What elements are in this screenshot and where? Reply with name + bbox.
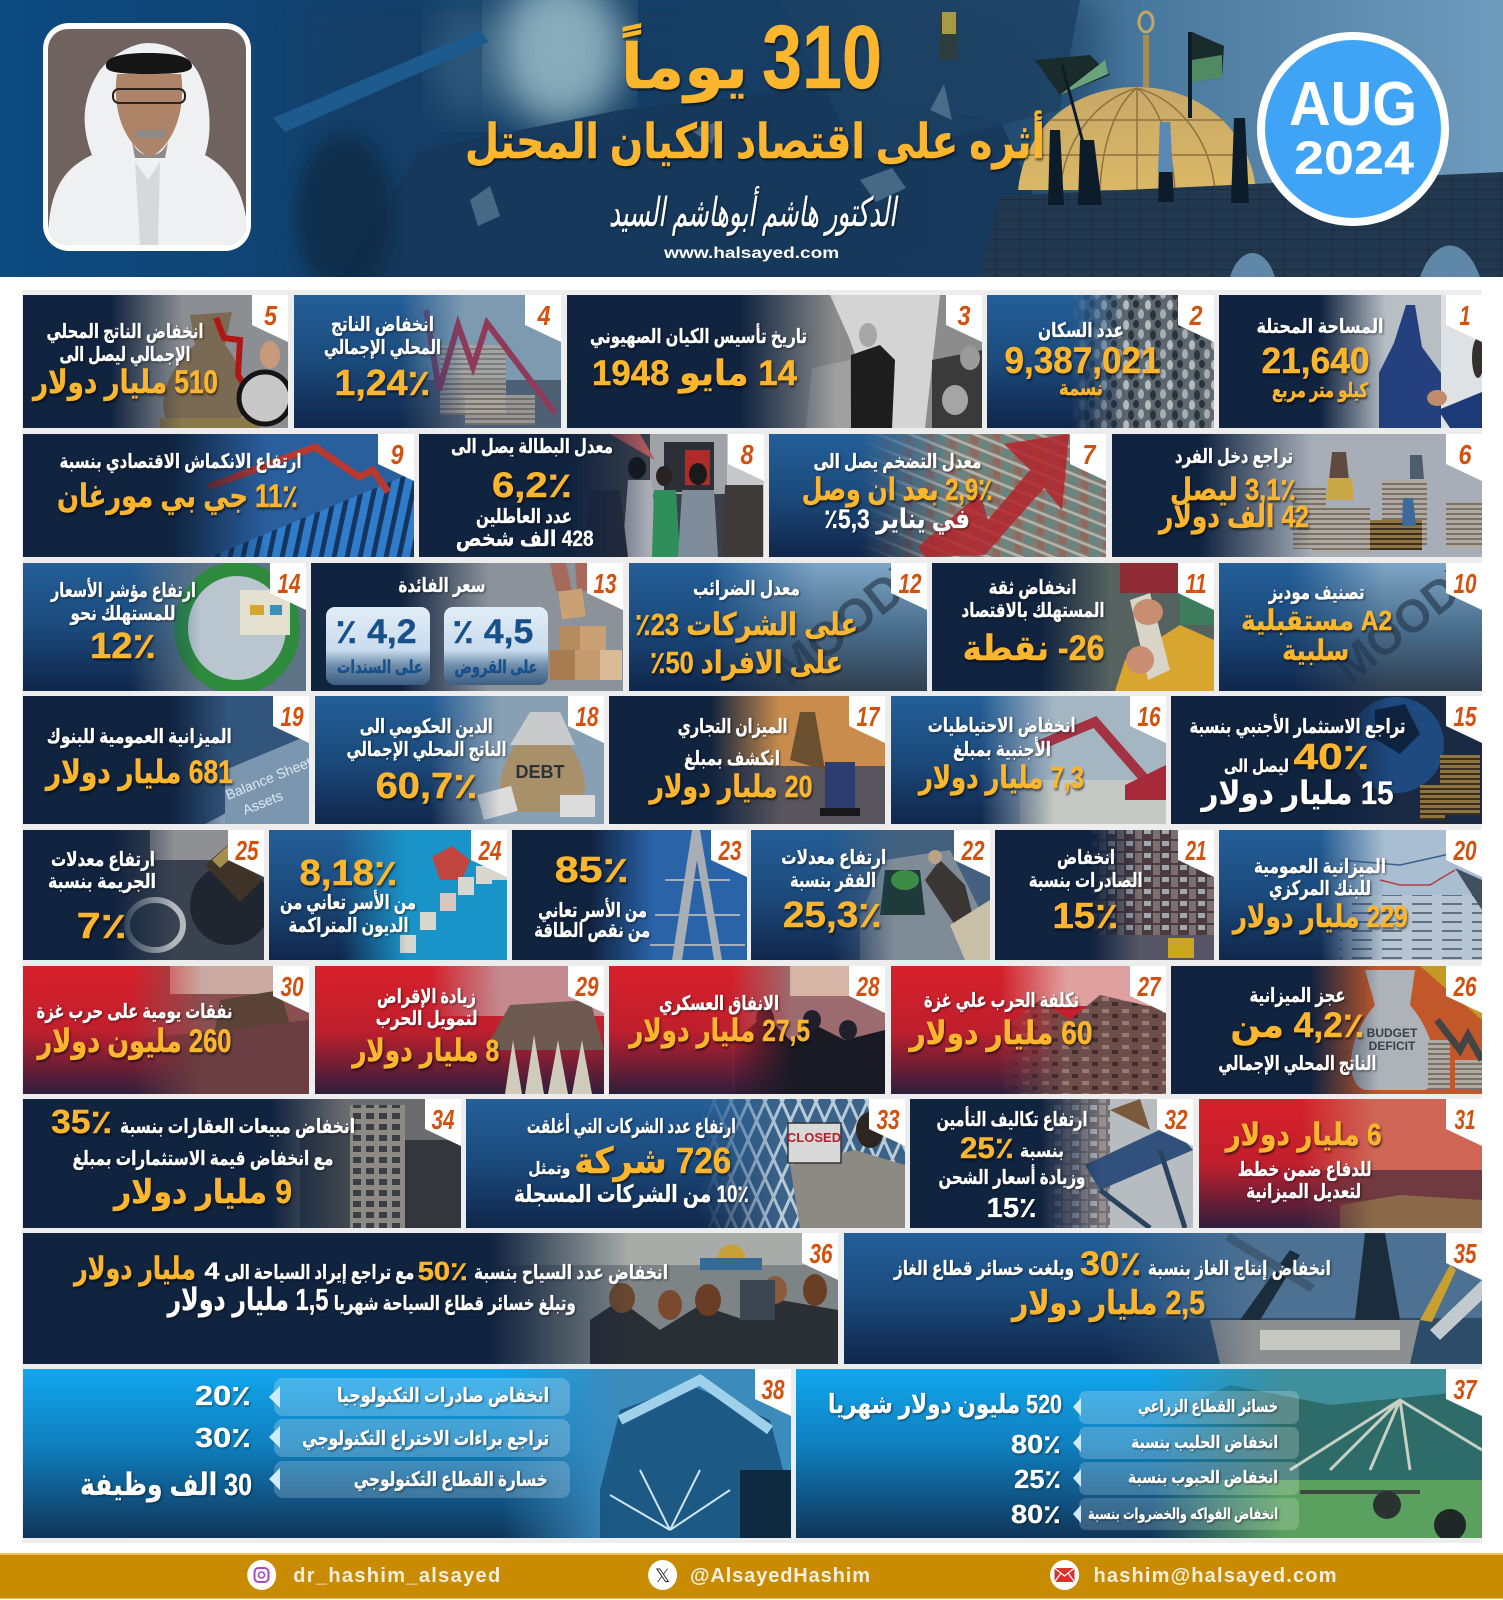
text: heading: سعر الفائدة <box>398 575 486 597</box>
photo: container yard <box>1090 830 1214 960</box>
row: tech job losses <box>80 1461 570 1503</box>
row: tech patents: تراجع براءات الاختراع التكنولوجي <box>302 1428 549 1451</box>
number badge 23 <box>711 830 747 877</box>
number badge 3: 3 <box>958 300 971 331</box>
photo: coins and falling arrow <box>400 295 561 428</box>
panel 3: founding date <box>567 295 982 428</box>
panel 17: trade balance <box>609 696 885 824</box>
row: tech patents <box>195 1419 570 1457</box>
photo: soldiers <box>730 966 885 1094</box>
panel 23: energy shortage <box>512 830 747 960</box>
text: heading: ارتفاع مؤشر الأسعار <box>50 577 196 602</box>
row: grain decline: انخفاض الحبوب بنسبة <box>1128 1468 1278 1488</box>
number badge 34 <box>425 1099 461 1146</box>
card: rate on bonds: 4,2 ٪ <box>336 613 416 651</box>
panel 32: insurance costs: 15٪ <box>987 1192 1037 1223</box>
photo: destroyed buildings <box>1000 966 1166 1094</box>
number badge 20 <box>1446 830 1482 877</box>
text: value: 260 مليون دولار <box>36 1023 232 1060</box>
text: value: 60 مليار دولار <box>908 1015 1092 1052</box>
photo: GDP bag <box>110 295 291 428</box>
text: value: 2,5 مليار دولار <box>1010 1284 1205 1323</box>
panel 17: trade balance: انكشف بمبلغ <box>684 748 780 770</box>
photo: power pylon <box>590 830 747 960</box>
number badge 6 <box>1446 434 1482 481</box>
number badge 13 <box>587 563 623 610</box>
panel 10: Moody's rating: سلبية <box>1282 635 1349 666</box>
text: second line <box>166 1282 576 1318</box>
panel 10: Moody's rating <box>1219 563 1482 691</box>
number badge 1 <box>1446 295 1482 342</box>
panel 20: central bank balance sheet <box>1219 830 1482 960</box>
panel 19: banks balance sheet <box>23 696 309 824</box>
website url: www.halsayed.com <box>663 245 839 262</box>
card: rate on bonds: على السندات <box>337 657 423 677</box>
photo: percent cubes <box>400 563 623 691</box>
panel 12: tax rates: على الافراد 50٪ <box>650 645 843 681</box>
grid background panel <box>22 290 1482 1543</box>
text: heading: معدل التضخم يصل الى <box>814 451 982 473</box>
text: percent: 40٪ <box>1294 736 1370 777</box>
text: value: A2 مستقبلية <box>1241 605 1392 636</box>
panel 24: household debt <box>269 830 507 960</box>
row: milk decline: انخفاض الحليب بنسبة <box>1131 1433 1278 1453</box>
panel 30: daily war spending <box>23 966 309 1094</box>
portrait of Dr. Hashim <box>43 23 251 251</box>
panel 34: real estate <box>23 1099 461 1228</box>
photo: globe and coins <box>1330 696 1482 824</box>
row: tech exports: انخفاض صادرات التكنولوجيا <box>337 1385 549 1407</box>
number badge 33 <box>869 1099 905 1146</box>
panel 37: agriculture losses <box>796 1369 1482 1541</box>
panel 36: tourism <box>23 1233 838 1364</box>
photo: artillery shells <box>430 966 604 1094</box>
number badge 11: 11 <box>1186 568 1206 599</box>
row: agricultural losses: خسائر القطاع الزراعي <box>1138 1397 1278 1417</box>
panel 31: defense budget: لتعديل الميزانية <box>1246 1181 1361 1203</box>
panel 15: foreign investment: ليصل الى <box>1224 756 1289 776</box>
photo: receipt in hand <box>1040 563 1214 691</box>
number badge 28 <box>849 966 885 1013</box>
text: heading: انخفاض مبيعات العقارات بنسبة <box>120 1116 355 1138</box>
photo: balance sheet paper: Assets <box>240 787 285 818</box>
photo: apartment towers <box>270 1099 461 1228</box>
text: value: 1,24٪ <box>334 362 430 403</box>
panel 24: household debt: الديون المتراكمة <box>288 915 408 937</box>
text: value: 681 مليار دولار <box>44 754 233 791</box>
text: heading: الميزان التجاري <box>678 716 788 739</box>
panel 29: war borrowing: لتمويل الحرب <box>376 1008 478 1030</box>
number badge 32 <box>1157 1099 1193 1146</box>
photo: dumpster <box>830 830 990 960</box>
text: heading: نفقات يومية على حرب غزة <box>36 1001 232 1023</box>
title: 310 days: 310 <box>762 8 882 108</box>
panel 27: war cost <box>891 966 1166 1094</box>
text: first line: مليار دولار <box>72 1251 196 1287</box>
card: rate on loans: 4,5 ٪ <box>452 613 533 651</box>
number badge 4 <box>525 295 561 342</box>
number badge 35 <box>1446 1233 1482 1280</box>
number badge 29 <box>568 966 604 1013</box>
photo: closed sign on gate: CLOSED <box>787 1130 841 1145</box>
panel 21: exports: الصادرات بنسبة <box>1029 870 1143 892</box>
text: value: 60,7٪ <box>376 765 478 806</box>
header banner <box>0 0 1503 295</box>
text: value: 7٪ <box>77 905 127 946</box>
text: heading: انخفاض الناتج المحلي <box>46 321 204 344</box>
text: value: 21,640 <box>1262 340 1370 381</box>
footer bar <box>0 1553 1503 1599</box>
text: heading: انخفاض <box>1057 847 1115 869</box>
photo: tanks <box>130 966 309 1094</box>
number badge 38 <box>755 1369 791 1416</box>
panel 21: exports <box>995 830 1214 960</box>
text: heading: تكلفة الحرب علي غزة <box>924 990 1079 1013</box>
photo: gavel and handcuffs <box>110 830 270 960</box>
panel 18: government debt: الناتج المحلي الإجمالي <box>346 739 506 762</box>
panel 32: insurance costs <box>910 1099 1193 1228</box>
text: first line: انخفاض عدد السياح بنسبة <box>474 1262 668 1284</box>
x contact: @AlsayedHashim <box>690 1565 870 1587</box>
number badge 18 <box>568 696 604 743</box>
title: 310 days: يوماً <box>621 22 748 103</box>
photo: container crane <box>1040 1099 1193 1228</box>
panel 8: unemployment <box>419 434 764 557</box>
panel 6: per capita income: 42 الف دولار <box>1157 499 1309 535</box>
photo: debt dice and house <box>340 830 507 960</box>
number badge 3 <box>946 295 982 342</box>
photo: irrigation field <box>1150 1369 1482 1541</box>
number badge 2 <box>1178 295 1214 342</box>
panel 32: insurance costs: 25٪ <box>960 1132 1014 1165</box>
text: heading: الدين الحكومي الى <box>360 716 493 739</box>
number badge 11 <box>1178 563 1214 610</box>
photo: welding robots <box>500 1369 791 1538</box>
panel 26: budget deficit <box>1171 966 1482 1094</box>
panel 38: technology losses <box>23 1369 791 1538</box>
number badge 8: 8 <box>740 439 754 470</box>
row: fruit and vegetables decline: انخفاض الفواكه والخضروات بنسبة <box>1088 1506 1278 1523</box>
email contact <box>1050 1560 1336 1590</box>
photo: map <box>1320 295 1484 428</box>
photo: historic flag raising <box>740 295 982 428</box>
text: value: 4,2٪ من <box>1230 1006 1364 1046</box>
text: value: 2,9٪ بعد ان وصل <box>802 472 993 508</box>
text: second line: وتبلغ خسائر قطاع السياحة شهريا <box>334 1293 576 1315</box>
instagram contact <box>247 1560 500 1590</box>
photo: budget deficit bag: BUDGET <box>1367 1026 1418 1040</box>
panel 13: interest rate <box>311 563 623 691</box>
number badge 12 <box>891 563 927 610</box>
number badge 12: 12 <box>898 568 922 599</box>
text: first line: وبلغت خسائر قطاع الغاز <box>893 1258 1074 1280</box>
number badge 25 <box>228 830 264 877</box>
panel 2: population <box>987 295 1214 428</box>
number badge 31 <box>1446 1099 1482 1146</box>
number badge 36 <box>802 1233 838 1280</box>
text: value: 9 مليار دولار <box>112 1173 292 1212</box>
panel 33: closed companies: وتمثل <box>528 1159 570 1179</box>
text: first line: 50٪ <box>418 1256 468 1286</box>
panel 22: poverty: الفقر بنسبة <box>790 870 876 892</box>
panel 7: inflation: في يناير 5,3٪ <box>824 504 970 535</box>
text: heading: تراجع دخل الفرد <box>1175 446 1293 468</box>
text: heading: الميزانية العمومية <box>1254 856 1386 878</box>
title: 310 days <box>621 8 882 108</box>
photo: magnifier on calculator <box>130 563 306 691</box>
text: heading: المساحة المحتلة <box>1256 316 1384 338</box>
text: value: على الشركات 23٪ <box>635 607 858 643</box>
x contact <box>648 1560 870 1590</box>
row: milk decline <box>1011 1427 1299 1459</box>
row: tech exports: 20٪ <box>195 1380 251 1411</box>
text: value: 85٪ <box>555 849 629 890</box>
text: heading: انخفاض ثقة <box>989 577 1077 599</box>
text: heading: ارتفاع معدلات <box>781 847 886 869</box>
text: value: 6,2٪ <box>492 466 572 505</box>
card: rate on loans: على القروض <box>454 657 538 678</box>
number badge 8 <box>728 434 764 481</box>
number badge 25: 25 <box>235 835 259 866</box>
photo: closed sign on gate <box>700 1099 905 1228</box>
instagram contact: dr_hashim_alsayed <box>293 1565 500 1587</box>
photo: debt bag <box>430 696 604 824</box>
panel 16: foreign reserves <box>891 696 1166 824</box>
row: grain decline <box>1014 1462 1299 1495</box>
number badge 6: 6 <box>1458 439 1472 470</box>
text: heading: زيادة الإقراض <box>377 986 476 1008</box>
number badge 16 <box>1130 696 1166 743</box>
row: agricultural losses: 520 مليون دولار شهريا <box>828 1389 1062 1420</box>
number badge 24 <box>471 830 507 877</box>
subtitle: أثره على اقتصاد الكيان المحتل <box>465 110 1045 170</box>
number badge 5: 5 <box>264 300 277 331</box>
date badge: AUG 2024: AUG <box>1289 70 1417 139</box>
text: value: 26- نقطة <box>963 629 1105 668</box>
panel 7: inflation <box>769 434 1106 557</box>
photo: city lights <box>1300 1099 1482 1228</box>
panel 18: government debt <box>315 696 604 824</box>
text: first line: 4 <box>204 1258 220 1285</box>
row: tech job losses: خسارة القطاع التكنولوجي <box>354 1469 548 1492</box>
photo: budget deficit bag <box>1310 966 1482 1094</box>
text: value: 510 مليار دولار <box>31 364 218 401</box>
row: agricultural losses <box>828 1389 1299 1424</box>
card: rate on loans <box>444 607 548 685</box>
text: heading: عجز الميزانية <box>1250 985 1346 1007</box>
row: fruit and vegetables decline <box>1011 1498 1299 1530</box>
photo: Moody's building <box>1300 563 1482 691</box>
email contact: hashim@halsayed.com <box>1094 1565 1336 1587</box>
number badge 19 <box>273 696 309 743</box>
panel 14: consumer price index <box>23 563 306 691</box>
text: description: للدفاع ضمن خطط <box>1238 1159 1372 1181</box>
text: value: 6 مليار دولار <box>1224 1117 1382 1153</box>
panel 34: real estate: 35٪ <box>51 1103 112 1140</box>
panel 9: contraction <box>23 434 414 557</box>
row: fruit and vegetables decline: 80٪ <box>1011 1499 1061 1529</box>
text: description: مع انخفاض قيمة الاستثمارات بمبلغ <box>72 1148 334 1170</box>
text: value: 8,18٪ <box>300 852 398 893</box>
number badge 10 <box>1446 563 1482 610</box>
panel 16: foreign reserves: الأجنبية بمبلغ <box>953 736 1051 761</box>
number badge 21 <box>1178 830 1214 877</box>
number badge 1: 1 <box>1460 300 1470 331</box>
panel 15: foreign investment <box>1171 696 1482 824</box>
text: heading: ارتفاع تكاليف التأمين <box>936 1105 1088 1131</box>
text: value: 3,1٪ ليصل <box>1170 472 1296 507</box>
author calligraphy signature: الدكتور هاشم أبوهاشم السيد <box>609 186 898 236</box>
text: first line: 30٪ <box>1080 1245 1141 1283</box>
photo: balance sheet paper <box>170 696 314 824</box>
text: first line <box>72 1251 668 1287</box>
panel 25: crime rate <box>23 830 264 960</box>
text: heading: تصنيف موديز <box>1268 582 1365 604</box>
number badge 2: 2 <box>1189 300 1203 331</box>
number badge 15 <box>1446 696 1482 743</box>
text: heading: عدد السكان <box>1038 320 1124 342</box>
text: description: من الأسر تعاني من <box>280 889 416 915</box>
photo: crowd <box>1070 295 1214 428</box>
number badge 22 <box>954 830 990 877</box>
text: heading: انخفاض الاحتياطيات <box>928 715 1076 737</box>
panel 20: central bank balance sheet: للبنك المركزي <box>1269 878 1371 901</box>
number badge 19: 19 <box>280 701 304 732</box>
text: first line: مع تراجع إيراد السياحة الى <box>224 1262 414 1284</box>
text: heading: معدل البطالة يصل الى <box>451 436 613 458</box>
text: value: 12٪ <box>90 625 156 666</box>
text: value: 8 مليار دولار <box>351 1033 499 1069</box>
row: tech exports <box>195 1378 570 1416</box>
number badge 7: 7 <box>1082 439 1097 470</box>
number badge 27 <box>1130 966 1166 1013</box>
text: heading: ارتفاع عدد الشركات التي أغلقت <box>527 1112 736 1139</box>
text: heading: ارتفاع الانكماش الاقتصادي بنسبة <box>60 451 302 474</box>
text: shipping: وزيادة أسعار الشحن <box>938 1163 1086 1189</box>
photo: offshore gas rig <box>1100 1233 1482 1364</box>
panel 31: defense budget <box>1199 1099 1482 1228</box>
photo: Moody's building: MOODY'S <box>764 517 974 697</box>
text: heading: الانفاق العسكري <box>659 993 779 1016</box>
text: value: 15 مليار دولار <box>1200 775 1394 812</box>
text: first line: انخفاض إنتاج الغاز بنسبة <box>1148 1258 1331 1280</box>
date badge: AUG 2024 <box>1257 32 1449 226</box>
text: description: الناتج المحلي الإجمالي <box>1218 1053 1376 1076</box>
panel 4: GDP decline: المحلي الإجمالي <box>324 337 441 360</box>
panel 33: closed companies <box>466 1099 905 1228</box>
number badge 30 <box>273 966 309 1013</box>
text: unit: نسمة <box>1059 378 1103 400</box>
number badge 9: 9 <box>390 439 404 470</box>
panel 14: consumer price index: للمستهلك نحو <box>70 603 176 625</box>
number badge 4: 4 <box>537 300 551 331</box>
panel 23: energy shortage: من نقص الطاقة <box>534 920 650 942</box>
text: heading: معدل الضرائب <box>693 578 800 600</box>
text: second line: 1,5 مليار دولار <box>166 1282 328 1318</box>
text: heading: الميزانية العمومية للبنوك <box>47 726 232 748</box>
text: value: 20 مليار دولار <box>648 769 812 805</box>
panel 11: consumer confidence: المستهلك بالاقتصاد <box>962 600 1104 622</box>
row: grain decline: 25٪ <box>1014 1464 1061 1494</box>
panel 12: tax rates <box>629 563 927 691</box>
text: description: من الأسر تعاني <box>538 897 647 923</box>
panel 25: crime rate: الجريمة بنسبة <box>48 871 156 893</box>
number badge 37 <box>1446 1369 1482 1416</box>
text: description: 10٪ من الشركات المسجلة <box>514 1181 749 1208</box>
number badge 5 <box>252 295 288 342</box>
row: milk decline: 80٪ <box>1011 1429 1061 1459</box>
header background photo: rubble, smoke and dome <box>0 0 1503 277</box>
panel 5: GDP value: الإجمالي ليصل الى <box>60 344 190 367</box>
number badge 14 <box>270 563 306 610</box>
photo: port at sunset <box>710 696 885 824</box>
panel 4: GDP decline <box>294 295 561 428</box>
text: value: 11٪ جي بي مورغان <box>57 478 298 515</box>
number badge 7 <box>1070 434 1106 481</box>
photo: shelves with red arrow <box>860 434 1106 557</box>
photo: dollars and red arrow <box>980 696 1166 824</box>
number badge 17 <box>849 696 885 743</box>
text: heading: تاريخ تأسيس الكيان الصهيوني <box>590 322 807 349</box>
panel 5: GDP value <box>23 295 288 428</box>
photo: tourists and Jerusalem view <box>490 1233 838 1364</box>
text: value: 14 مايو 1948 <box>592 354 798 394</box>
row: tech patents: 30٪ <box>195 1422 251 1453</box>
panel 28: military spending <box>609 966 885 1094</box>
text: value: 15٪ <box>1052 895 1118 936</box>
panel 6: per capita income <box>1112 434 1482 557</box>
photo: balance sheet paper: Balance Sheet <box>223 754 314 803</box>
photo: budget deficit bag: DEFICIT <box>1369 1039 1416 1053</box>
photo: blue bar chart with arrow <box>170 434 414 557</box>
text: value: 9,387,021 <box>1004 340 1160 381</box>
photo: coin stacks with figures <box>1200 434 1482 557</box>
text: unit: كيلو متر مربع <box>1272 380 1368 402</box>
panel 22: poverty <box>751 830 990 960</box>
text: heading: ارتفاع معدلات <box>51 849 155 871</box>
number badge 10: 10 <box>1454 568 1477 599</box>
number badge 26 <box>1446 966 1482 1013</box>
text: heading: تراجع الاستثمار الأجنبي بنسبة <box>1190 713 1406 739</box>
text: value: 229 مليار دولار <box>1231 899 1408 935</box>
photo: debt bag: DEBT <box>516 762 565 782</box>
text: first line <box>893 1245 1331 1283</box>
photo: financial chart paper <box>1320 830 1482 960</box>
text: value: 726 شركة <box>574 1140 731 1182</box>
panel 29: war borrowing <box>315 966 604 1094</box>
panel 35: gas production <box>844 1233 1482 1364</box>
photo: people queueing <box>570 434 764 557</box>
date badge: AUG 2024: 2024 <box>1294 131 1414 184</box>
card: rate on bonds <box>326 607 430 685</box>
panel 8: unemployment: 428 الف شخص <box>456 526 594 551</box>
x contact: 𝕏 <box>655 1566 670 1587</box>
text: unemployed count: عدد العاطلين <box>476 506 572 528</box>
text: value: 27,5 مليار دولار <box>628 1013 810 1049</box>
text: value: 7,3 مليار دولار <box>917 760 1084 796</box>
panel 11: consumer confidence <box>932 563 1214 691</box>
text: value: 25,3٪ <box>783 894 882 935</box>
number badge 9 <box>378 434 414 481</box>
panel 1: occupied area <box>1219 295 1482 428</box>
text: percent: بنسبة <box>1020 1141 1064 1161</box>
row: tech job losses: 30 الف وظيفة <box>80 1467 252 1503</box>
text: heading: انخفاض الناتج <box>331 314 434 336</box>
